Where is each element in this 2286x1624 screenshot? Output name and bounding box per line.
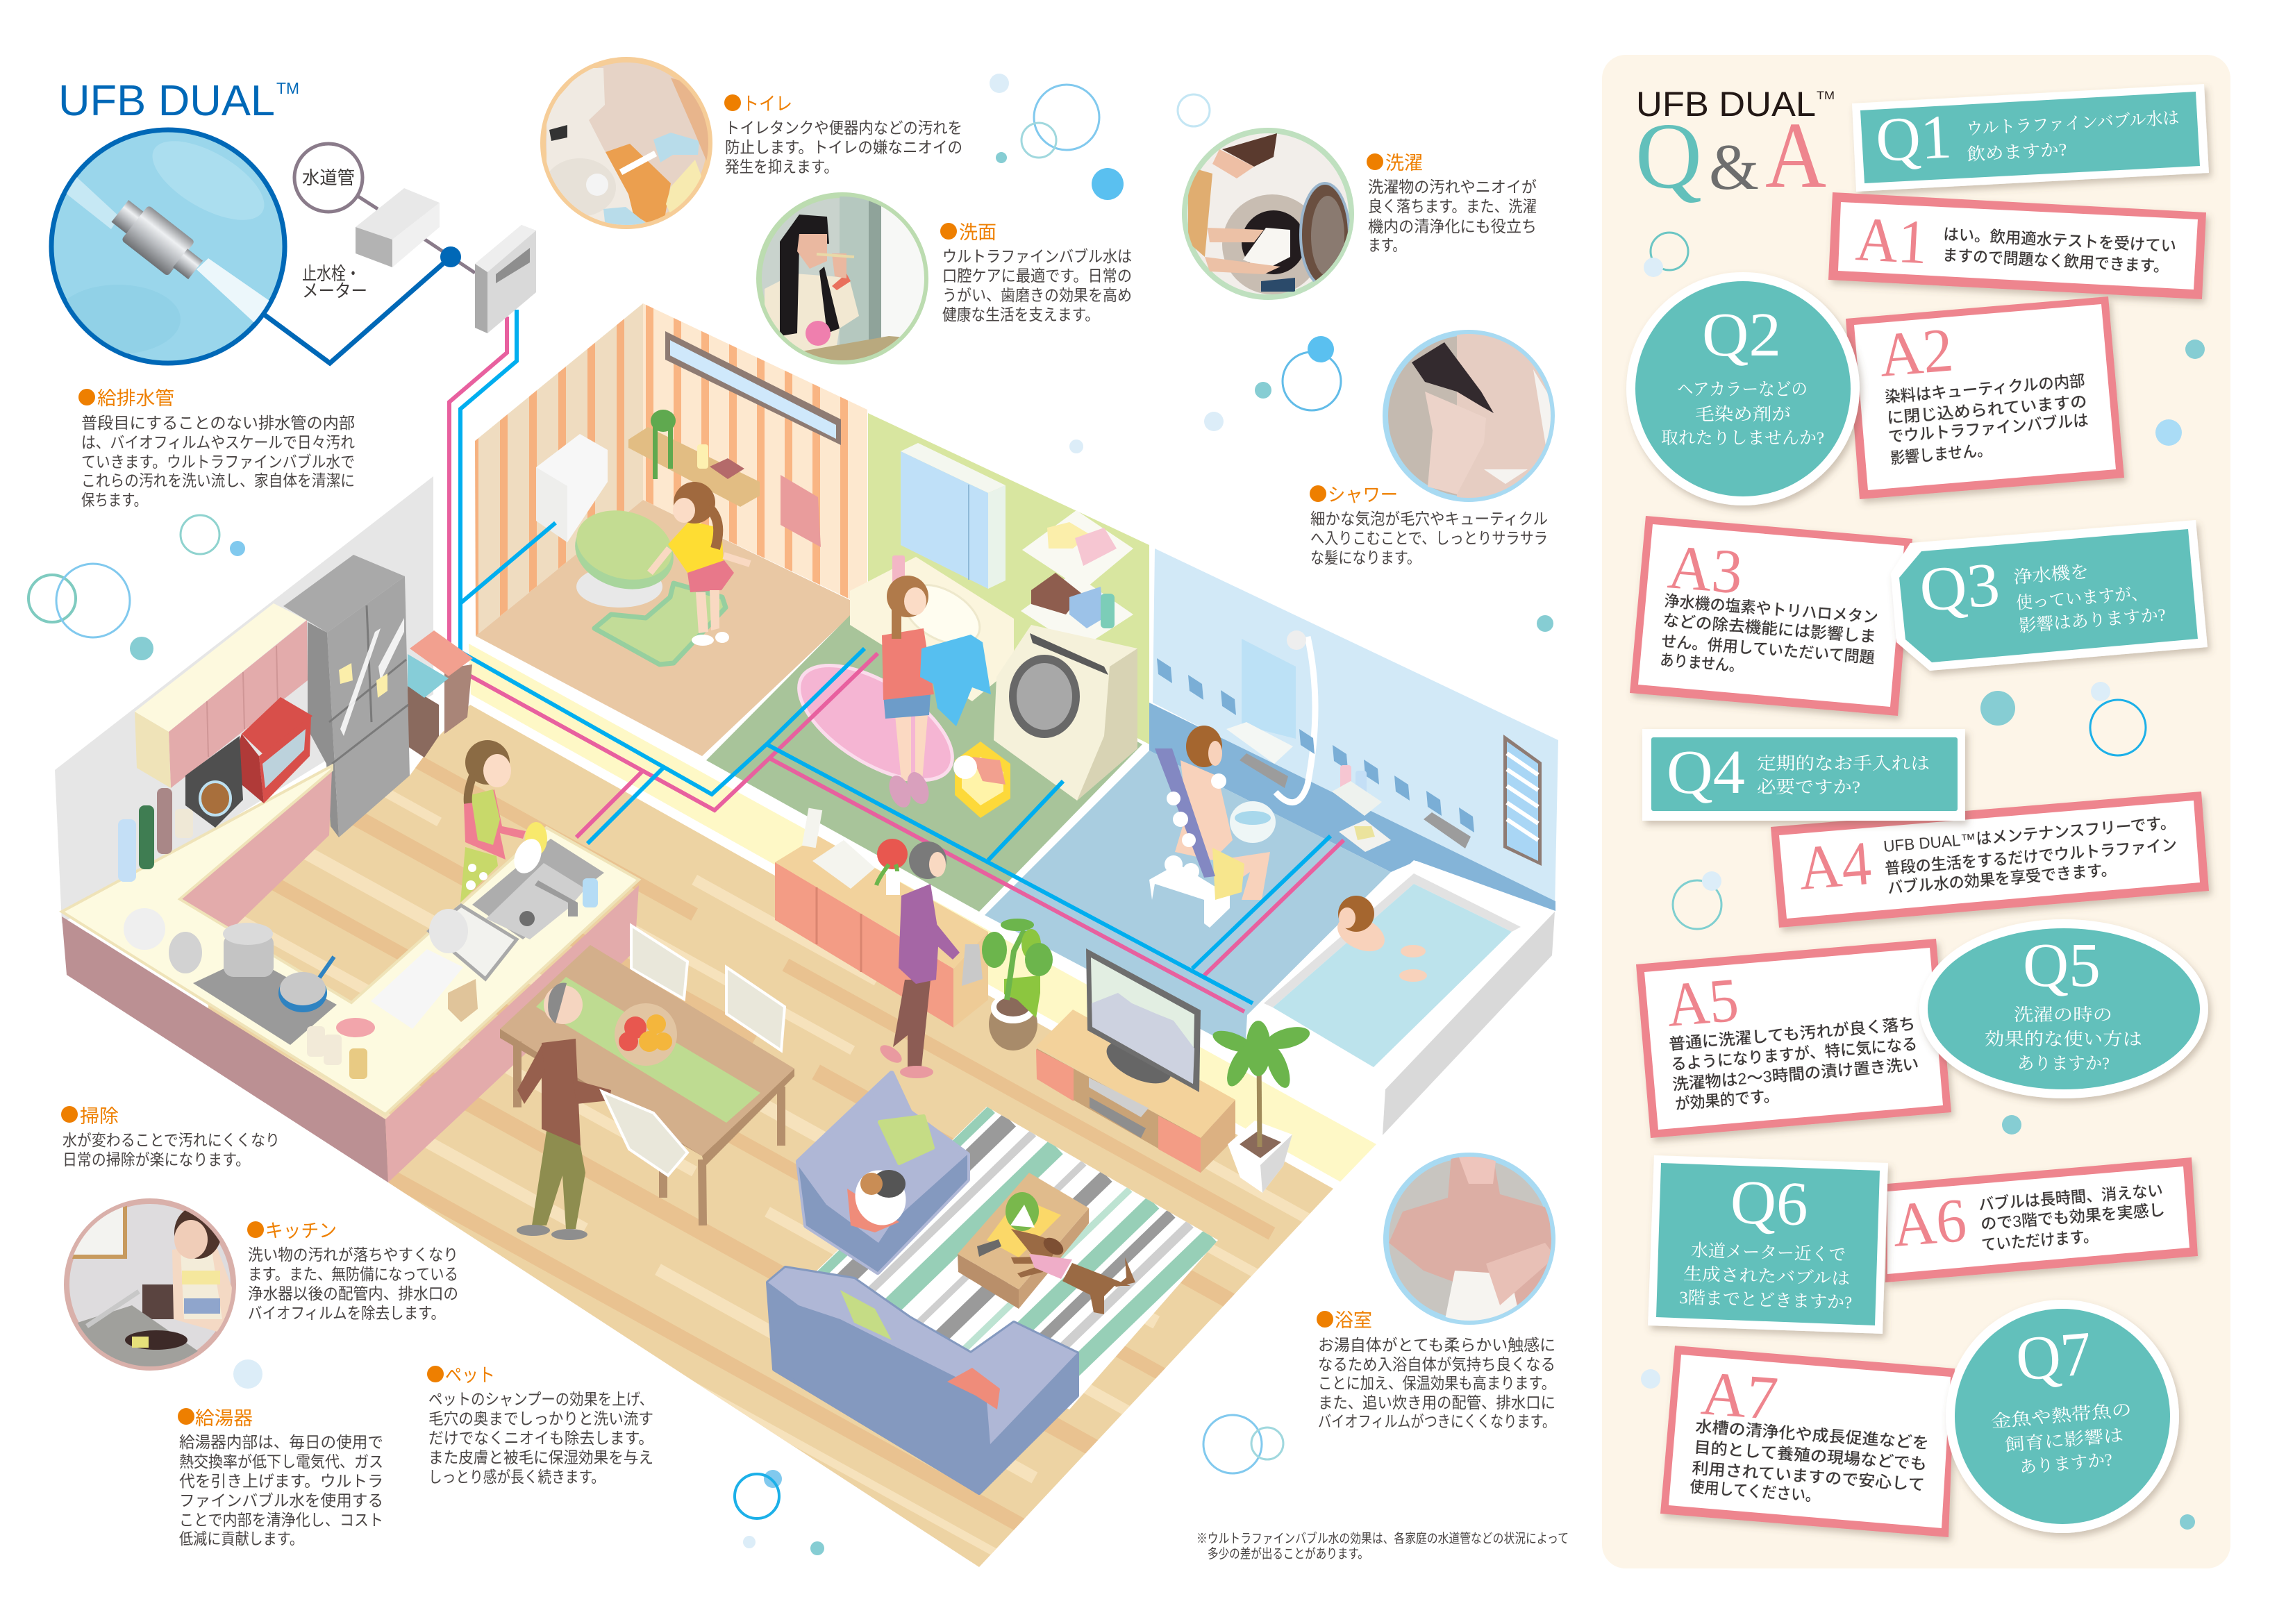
card: A1: はい。飲用適水テストを受けてい [1943, 225, 2177, 256]
text block: water heater: ことで内部を清浄化し、コスト [179, 1511, 383, 1529]
card: Q6: 3階までとどきますか? [1679, 1288, 1853, 1312]
card: Q7: 金魚や熱帯魚の [1990, 1400, 2133, 1432]
card: Q4 [1642, 729, 1965, 821]
kitchen counter [62, 766, 639, 1182]
laundry basket [953, 742, 1010, 818]
photo: woman with hair [1385, 333, 1555, 500]
card: Q4: Q4 [1667, 738, 1745, 807]
coffee maker and microwave [185, 697, 312, 828]
wash basin counter [850, 555, 1014, 701]
card: A6 [1885, 1157, 2198, 1282]
card: A3: 浄水機の塩素やトリハロメタン [1664, 592, 1879, 626]
heading: UFB DUAL Q&A [1635, 85, 1835, 208]
title: UFB DUAL: TM [276, 79, 299, 97]
card: Q3: 浄水機を [2012, 562, 2089, 587]
card: A6: バブルは長時間、消えない [1978, 1181, 2164, 1214]
text block: toilet: トイレ [742, 94, 792, 115]
photo: girl brushing teeth [759, 194, 930, 383]
text block: laundry: 機内の清浄化にも役立ち [1368, 217, 1537, 235]
photo: woman after bath [1386, 1155, 1555, 1323]
card: A1: ますので問題なく飲用できます。 [1942, 246, 2169, 276]
person: woman at sink [460, 740, 547, 903]
card: A2 [1846, 296, 2124, 499]
card: Q3: Q3 [1917, 550, 2002, 625]
text block: water heater: 熱交換率が低下し電気代、ガス [179, 1453, 383, 1471]
heading: UFB DUAL Q&A: UFB DUAL [1636, 85, 1816, 124]
person: boy in bath [1332, 896, 1427, 982]
illustration: water supply diagram [51, 125, 475, 363]
person: older woman watering [877, 842, 983, 1078]
shelf [628, 427, 760, 507]
text block: bathroom: バイオフィルムがつきにくくなります。 [1318, 1412, 1555, 1430]
trash bins [408, 630, 473, 757]
text block: kitchen: バイオフィルムを除去します。 [248, 1304, 445, 1322]
phone and flowers [802, 808, 908, 895]
card: A7: 使用してください。 [1690, 1477, 1821, 1505]
text block: water heater: 給湯器 [195, 1408, 253, 1429]
text block: shower: な髪になります。 [1310, 549, 1421, 567]
text block: shower: へ入りこむことで、しっとりサラサラ [1310, 529, 1548, 547]
card: Q7: ありますか? [2019, 1450, 2113, 1477]
card: Q2: 取れたりしませんか? [1661, 429, 1824, 448]
footnote: ※ウルトラファインバブル水の効果は、各家庭の水道管などの状況によって [1196, 1530, 1569, 1546]
text block: pipes: 普段目にすることのない排水管の内部 [81, 414, 355, 432]
card: A2: に閉じ込められていますの [1886, 392, 2087, 427]
room: toilet [475, 303, 867, 756]
card: A2: 影響しません。 [1889, 441, 1992, 467]
heading: UFB DUAL Q&A: Q [1635, 104, 1702, 208]
card: A4 [1771, 792, 2209, 928]
card: Q4: 定期的なお手入れは [1757, 754, 1930, 773]
label: water pipe [294, 144, 362, 212]
dining table and chairs [500, 926, 794, 1225]
text block: pipes [78, 388, 355, 509]
text block: washbasin: 洗面 [959, 222, 996, 243]
card: Q2 [1626, 272, 1860, 505]
text block: cleaning: 水が変わることで汚れにくくなり [62, 1131, 280, 1149]
text block: washbasin: 口腔ケアに最適です。日常の [942, 267, 1132, 285]
person: girl cleaning [650, 482, 750, 646]
heading: UFB DUAL Q&A: & [1709, 131, 1759, 203]
text block: pets: だけでなくニオイも除去します。 [428, 1429, 653, 1447]
card: A4: A4 [1796, 829, 1874, 903]
text block: bathroom: なるため入浴自体が気持ち良くなる [1318, 1355, 1555, 1373]
room: bathroom [985, 549, 1558, 1135]
card: Q5: 効果的な使い方は [1985, 1030, 2142, 1049]
kitchen: back wall [55, 476, 433, 923]
text block: water heater: 代を引き上げます。ウルトラ [179, 1472, 383, 1490]
text block: pipes: 保ちます。 [81, 491, 147, 509]
plant: pot on floor [982, 919, 1053, 1050]
pink rug [781, 643, 971, 803]
card: A7 [1660, 1346, 1955, 1537]
card: A4: UFB DUAL™はメンテナンスフリーです。 [1883, 813, 2176, 855]
text block: toilet: 発生を抑えます。 [725, 158, 838, 176]
text block: cleaning: 日常の掃除が楽になります。 [62, 1150, 250, 1169]
label: stop valve meter: メーター [302, 281, 367, 301]
card: A3 [1630, 516, 1912, 716]
card: A3: などの除去機能には影響しま [1662, 611, 1877, 646]
floor: wood living room [208, 705, 1333, 1567]
card: Q2: 毛染め剤が [1695, 405, 1791, 424]
card: A6: A6 [1890, 1186, 1969, 1260]
card: Q1 [1852, 84, 2209, 192]
card: A7: 水槽の清浄化や成長促進などを [1695, 1417, 1930, 1453]
text block: toilet: 防止します。トイレの嫌なニオイの [725, 138, 962, 156]
card: Q3: 使っていますが、 [2015, 583, 2149, 613]
text block: washbasin: ウルトラファインバブル水は [942, 247, 1132, 265]
text block: bathroom: ことに加え、保温効果も高まります。 [1318, 1374, 1555, 1392]
card: Q6: Q6 [1729, 1168, 1809, 1239]
photo: UFB device in water [51, 125, 285, 363]
cat [847, 1163, 914, 1232]
card: A4: バブル水の効果を享受できます。 [1887, 860, 2117, 897]
text block: pets [427, 1365, 653, 1486]
yellow hall band [469, 644, 1376, 1182]
plant: palm in white pot [1210, 1021, 1312, 1193]
card: A6: ていただけます。 [1980, 1227, 2099, 1254]
card: Q2: ヘアカラーなどの [1677, 380, 1808, 399]
label: stop valve meter: 止水栓・ [302, 263, 360, 284]
text block: pets: しっとり感が長く続きます。 [428, 1468, 605, 1486]
text block: water heater: 低減に貢献します。 [179, 1530, 303, 1548]
text block: pets: 毛穴の奥までしっかりと洗い流す [428, 1409, 653, 1428]
card: Q4: 必要ですか? [1757, 778, 1860, 797]
card: A2: A2 [1876, 315, 1955, 390]
text block: laundry: 洗濯物の汚れやニオイが [1368, 178, 1537, 196]
text block: pets: ペットのシャンプーの効果を上げ、 [428, 1390, 653, 1408]
text block: pipes: 給排水管 [97, 388, 174, 409]
card: Q3: 影響はありますか? [2018, 605, 2167, 636]
card: A5: 洗濯物は2〜3時間の漬け置き洗い [1671, 1055, 1919, 1094]
card: A5: A5 [1664, 966, 1741, 1040]
washing machine [994, 625, 1137, 801]
card: A6: ので3階でも効果を実感し [1980, 1200, 2166, 1233]
text block: laundry: 良く落ちます。また、洗濯 [1368, 197, 1537, 215]
card: A5 [1636, 939, 1951, 1138]
card: Q1: ウルトラファインバブル水は [1966, 108, 2180, 139]
towel shelves [1021, 510, 1133, 649]
card: A5: 普通に洗濯しても汚れが良く落ち [1668, 1014, 1916, 1053]
card: A3: ありません。 [1660, 651, 1744, 675]
kitchen bottles [118, 788, 193, 882]
louver window [1503, 735, 1542, 866]
card: A5: が効果的です。 [1674, 1087, 1779, 1113]
card: A4: 普段の生活をするだけでウルトラファイン [1884, 835, 2178, 878]
heading: UFB DUAL Q&A: A [1765, 103, 1826, 208]
person: man sitting [1149, 726, 1276, 928]
text block: pets: また皮膚と被毛に保湿効果を与え [428, 1448, 653, 1466]
footnote [1196, 1530, 1569, 1562]
wall tiles [1157, 658, 1474, 832]
card: A2: でウルトラファインバブルは [1887, 411, 2089, 446]
card: Q3 [1891, 520, 2208, 671]
text block: toilet: トイレタンクや便器内などの汚れを [725, 119, 962, 137]
card: Q6: 水道メーター近くで [1691, 1241, 1846, 1265]
text block: washbasin [940, 222, 1132, 324]
card: Q6 [1648, 1155, 1888, 1334]
washroom person: woman holding T-shirt [882, 576, 991, 810]
text block: shower: シャワー [1328, 485, 1398, 505]
photo: woman at kitchen sink [67, 1201, 233, 1368]
toiletries [1332, 765, 1391, 852]
text block: laundry: 洗濯 [1385, 153, 1423, 174]
sink and dish rack [429, 839, 604, 979]
text block: bathroom [1317, 1310, 1555, 1430]
text block: bathroom: 浴室 [1335, 1310, 1372, 1331]
card: Q2: Q2 [1702, 301, 1781, 369]
title: UFB DUAL: UFB DUAL [58, 77, 275, 125]
text block: kitchen: 浄水器以後の配管内、排水口の [248, 1284, 458, 1303]
room: wash room [706, 413, 1149, 912]
card: A1 [1828, 192, 2206, 299]
cabinet: phone sideboard [775, 808, 988, 1028]
card: Q7: Q7 [2013, 1319, 2094, 1394]
toilet mat [594, 583, 726, 664]
card: Q7: 飼育に影響は [2004, 1425, 2124, 1455]
TV stand and TV [1036, 948, 1235, 1173]
text block: toilet [724, 94, 962, 176]
card: A5: るようになりますが、特に気になる [1670, 1035, 1918, 1073]
card: A2: 染料はキューティクルの内部 [1884, 371, 2085, 406]
card: Q5: ありますか? [2017, 1055, 2110, 1073]
text block: washbasin: うがい、歯磨きの効果を高め [942, 286, 1132, 304]
photo: toilet cleaning [543, 60, 712, 237]
text block: shower [1310, 485, 1548, 567]
sofa: two seater [768, 1268, 1077, 1493]
person: man at table [517, 982, 687, 1240]
text block: shower: 細かな気泡が毛穴やキューティクル [1310, 510, 1548, 528]
text block: kitchen [247, 1221, 458, 1322]
text block: kitchen: 洗い物の汚れが落ちやすくなり [248, 1246, 458, 1264]
label: water pipe: 水道管 [302, 167, 355, 188]
card: A3: A3 [1665, 533, 1745, 607]
text block: cleaning [61, 1106, 280, 1169]
toilet bowl and tank [536, 434, 682, 608]
striped rug [817, 1107, 1218, 1409]
mirror cabinet [901, 443, 1006, 589]
card: Q5 [1919, 919, 2208, 1098]
text block: pipes: これらの汚れを洗い流し、家自体を清潔に [81, 471, 355, 489]
text block: water heater [178, 1408, 383, 1548]
card: Q1: Q1 [1874, 102, 1953, 175]
text block: water heater: ファインバブル水を使用する [179, 1491, 383, 1509]
card: A7: 目的として養殖の現場などでも [1694, 1438, 1928, 1473]
bath mirror and shower [1226, 630, 1471, 848]
dog [1011, 1229, 1135, 1314]
card: Q5: Q5 [2023, 931, 2101, 1000]
water heater unit [475, 225, 536, 333]
text block: water heater: 給湯器内部は、毎日の使用で [179, 1433, 383, 1451]
towel [781, 475, 821, 547]
card: Q5: 洗濯の時の [2014, 1005, 2112, 1025]
card: A1: A1 [1854, 205, 1929, 277]
panel: Q&A background [1602, 55, 2230, 1568]
card: A3: せん。併用していただいて問題 [1661, 632, 1876, 667]
text block: laundry [1367, 153, 1537, 254]
text block: laundry: ます。 [1368, 236, 1405, 254]
text block: kitchen: キッチン [265, 1221, 337, 1241]
upper cabinet [135, 603, 308, 788]
sofa: single seat with cat [799, 1073, 967, 1272]
fridge [283, 555, 410, 837]
bathtub [1247, 860, 1555, 1135]
pipes: hot and cold water [449, 310, 1344, 1012]
text block: pets: ペット [445, 1365, 495, 1386]
label: stop valve meter [302, 263, 367, 301]
heading: UFB DUAL Q&A: TM [1817, 89, 1835, 102]
text block: bathroom: お湯自体がとても柔らかい触感に [1318, 1336, 1555, 1354]
text block: cleaning: 掃除 [80, 1106, 119, 1127]
card: Q1: 飲めますか? [1967, 140, 2067, 165]
card: A7: A7 [1699, 1359, 1780, 1433]
card: A7: 利用されていますので安心して [1692, 1459, 1926, 1494]
card: Q6: 生成されたバブルは [1683, 1264, 1851, 1289]
icon: water meter box [356, 188, 440, 267]
text block: kitchen: ます。また、無防備になっている [248, 1265, 458, 1283]
text block: bathroom: また、追い炊き用の配管、排水口に [1318, 1393, 1555, 1412]
card: Q7 [1946, 1300, 2179, 1533]
text block: pipes: は、バイオフィルムやスケールで日々汚れ [81, 433, 355, 451]
cooktop, pots and utensils [124, 908, 478, 1079]
text block: washbasin: 健康な生活を支えます。 [942, 305, 1099, 324]
footnote: 多少の差が出ることがあります。 [1208, 1546, 1369, 1562]
coffee table with dog and plant [958, 1173, 1135, 1314]
text block: pipes: ていきます。ウルトラファインバブル水で [81, 453, 355, 471]
photo: laundry [1185, 131, 1351, 297]
window [665, 331, 841, 445]
